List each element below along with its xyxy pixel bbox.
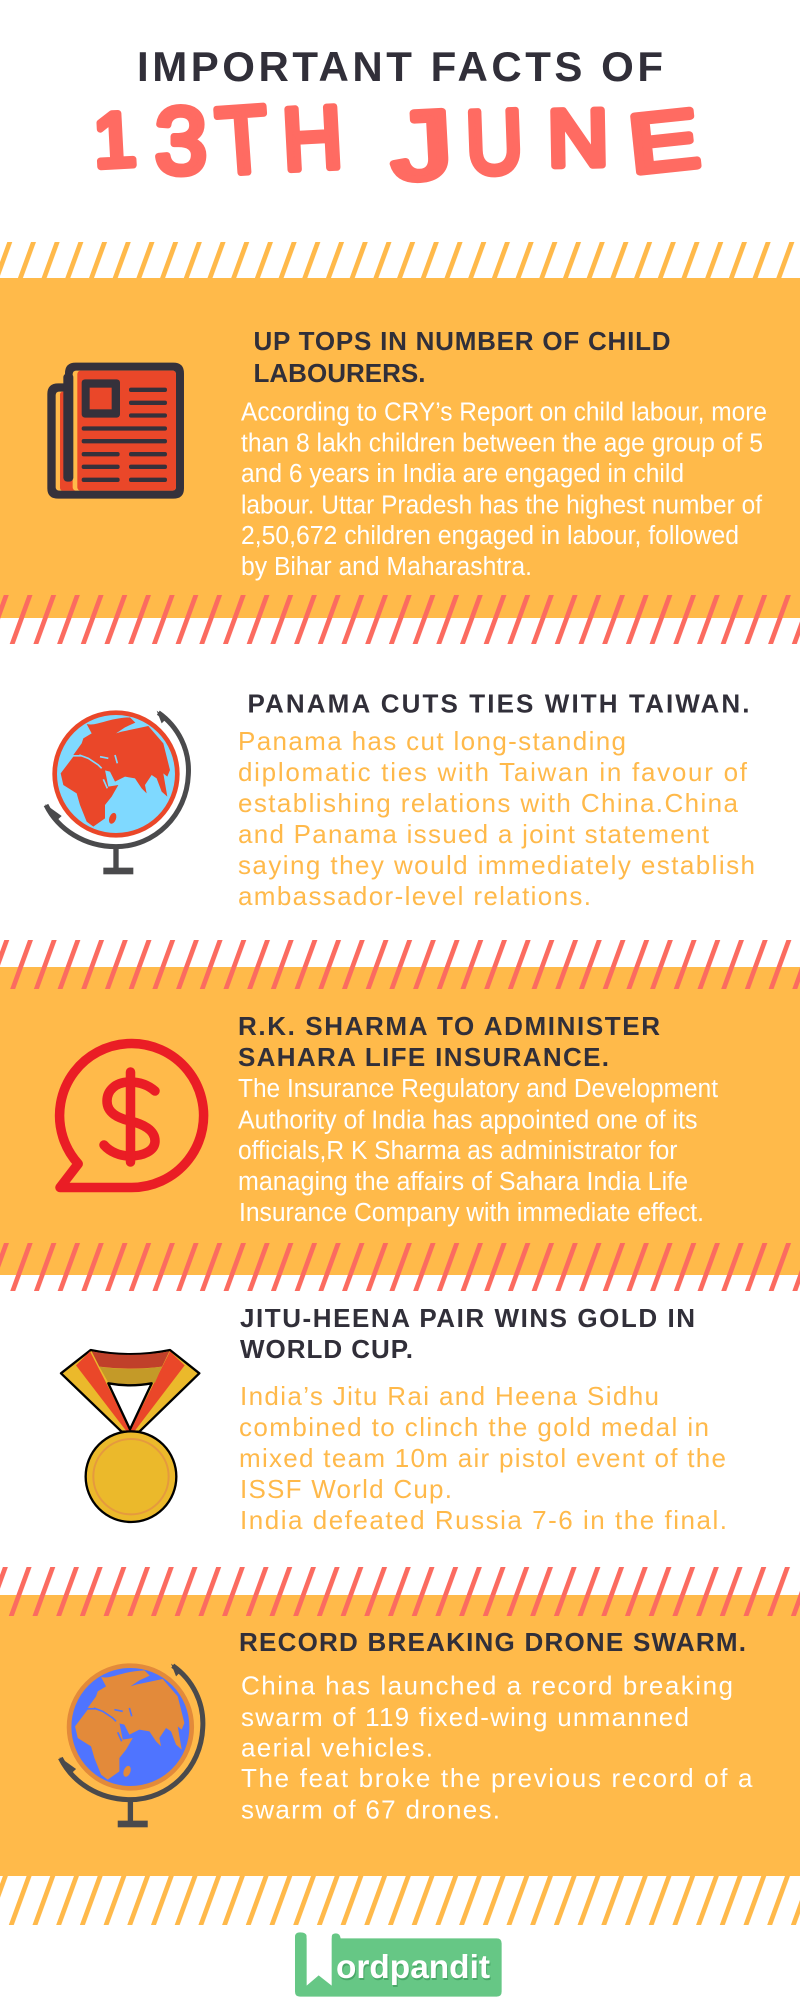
body text: and 6 years in India are engaged in child — [241, 460, 684, 488]
body text: swarm of 67 drones. — [241, 1794, 500, 1824]
body text: 2,50,672 children engaged in labour, followed — [241, 522, 739, 550]
body text: than 8 lakh children between the age group of 5 — [241, 430, 763, 458]
title line: 13th june: 3 — [155, 88, 207, 193]
icon: dollar speech bubble — [60, 1044, 204, 1188]
logo: wordpandit — [295, 1932, 502, 1997]
icon: globe — [59, 1664, 203, 1827]
heading: JITU-HEENA PAIR WINS GOLD IN — [240, 1303, 695, 1333]
body text: According to CRY’s Report on child labour, more — [241, 398, 767, 426]
body text: aerial vehicles. — [241, 1732, 433, 1762]
heading: WORLD CUP. — [240, 1334, 413, 1364]
body text: by Bihar and Maharashtra. — [241, 553, 532, 581]
body text — [241, 1670, 753, 1824]
title line: 13th june: N — [547, 93, 609, 183]
panel: jitu-heena gold — [61, 1303, 727, 1535]
title line: 13th june: E — [624, 93, 703, 191]
title line: important facts of: IMPORTANT FACTS OF — [137, 43, 663, 90]
heading: UP TOPS IN NUMBER OF CHILD — [254, 326, 670, 356]
title line: 13th june: U — [464, 92, 525, 194]
body text: ISSF World Cup. — [240, 1474, 452, 1504]
body text: saying they would immediately establish — [238, 850, 755, 880]
panel: sahara life insurance — [0, 967, 800, 1275]
title line: 13th june: H — [280, 87, 345, 189]
body text: establishing relations with China.China — [238, 788, 739, 818]
title line: 13th june: 1 — [91, 97, 138, 184]
heading: PANAMA CUTS TIES WITH TAIWAN. — [248, 688, 750, 718]
body text: The feat broke the previous record of a — [241, 1763, 753, 1793]
body text: China has launched a record breaking — [241, 1670, 733, 1700]
heading: LABOURERS. — [254, 358, 426, 388]
body text: India defeated Russia 7-6 in the final. — [240, 1505, 727, 1535]
logo badge — [295, 1932, 502, 1997]
panel: panama — [45, 688, 755, 911]
body text: ambassador-level relations. — [238, 881, 591, 911]
heading — [254, 326, 670, 388]
body text — [238, 1075, 718, 1227]
body text — [239, 1381, 727, 1535]
title line: 13th june: J — [388, 91, 455, 201]
body text: mixed team 10m air pistol event of the — [239, 1443, 726, 1473]
heading: SAHARA LIFE INSURANCE. — [238, 1042, 609, 1072]
heading: R.K. SHARMA TO ADMINISTER — [238, 1011, 660, 1041]
body text: labour. Uttar Pradesh has the highest number of — [241, 492, 763, 520]
title — [91, 43, 703, 201]
body text: India’s Jitu Rai and Heena Sidhu — [240, 1381, 659, 1411]
body text: swarm of 119 fixed-wing unmanned — [241, 1702, 689, 1732]
body text: Authority of India has appointed one of its — [238, 1106, 698, 1134]
icon: globe — [45, 711, 188, 874]
panel: child labourers — [0, 278, 800, 618]
panel: drone swarm — [0, 1595, 800, 1876]
body text: combined to clinch the gold medal in — [239, 1412, 709, 1442]
title line: 13th june — [91, 86, 703, 201]
heading — [238, 1011, 660, 1072]
body text — [238, 726, 755, 911]
body text: officials,R K Sharma as administrator for — [238, 1137, 678, 1165]
icon: medal — [61, 1350, 199, 1522]
body text: The Insurance Regulatory and Development — [238, 1075, 718, 1103]
icon: newspaper — [47, 363, 184, 499]
body text: diplomatic ties with Taiwan in favour of — [238, 757, 748, 787]
body text: managing the affairs of Sahara India Life — [238, 1168, 688, 1196]
body text: Insurance Company with immediate effect. — [239, 1199, 704, 1227]
heading: RECORD BREAKING DRONE SWARM. — [239, 1627, 746, 1657]
body text: and Panama issued a joint statement — [238, 819, 710, 849]
title line: 13th june: T — [213, 86, 271, 194]
logo text: ordpandit — [336, 1948, 490, 1985]
heading — [240, 1303, 695, 1364]
body text: Panama has cut long-standing — [238, 726, 626, 756]
body text — [241, 398, 767, 581]
